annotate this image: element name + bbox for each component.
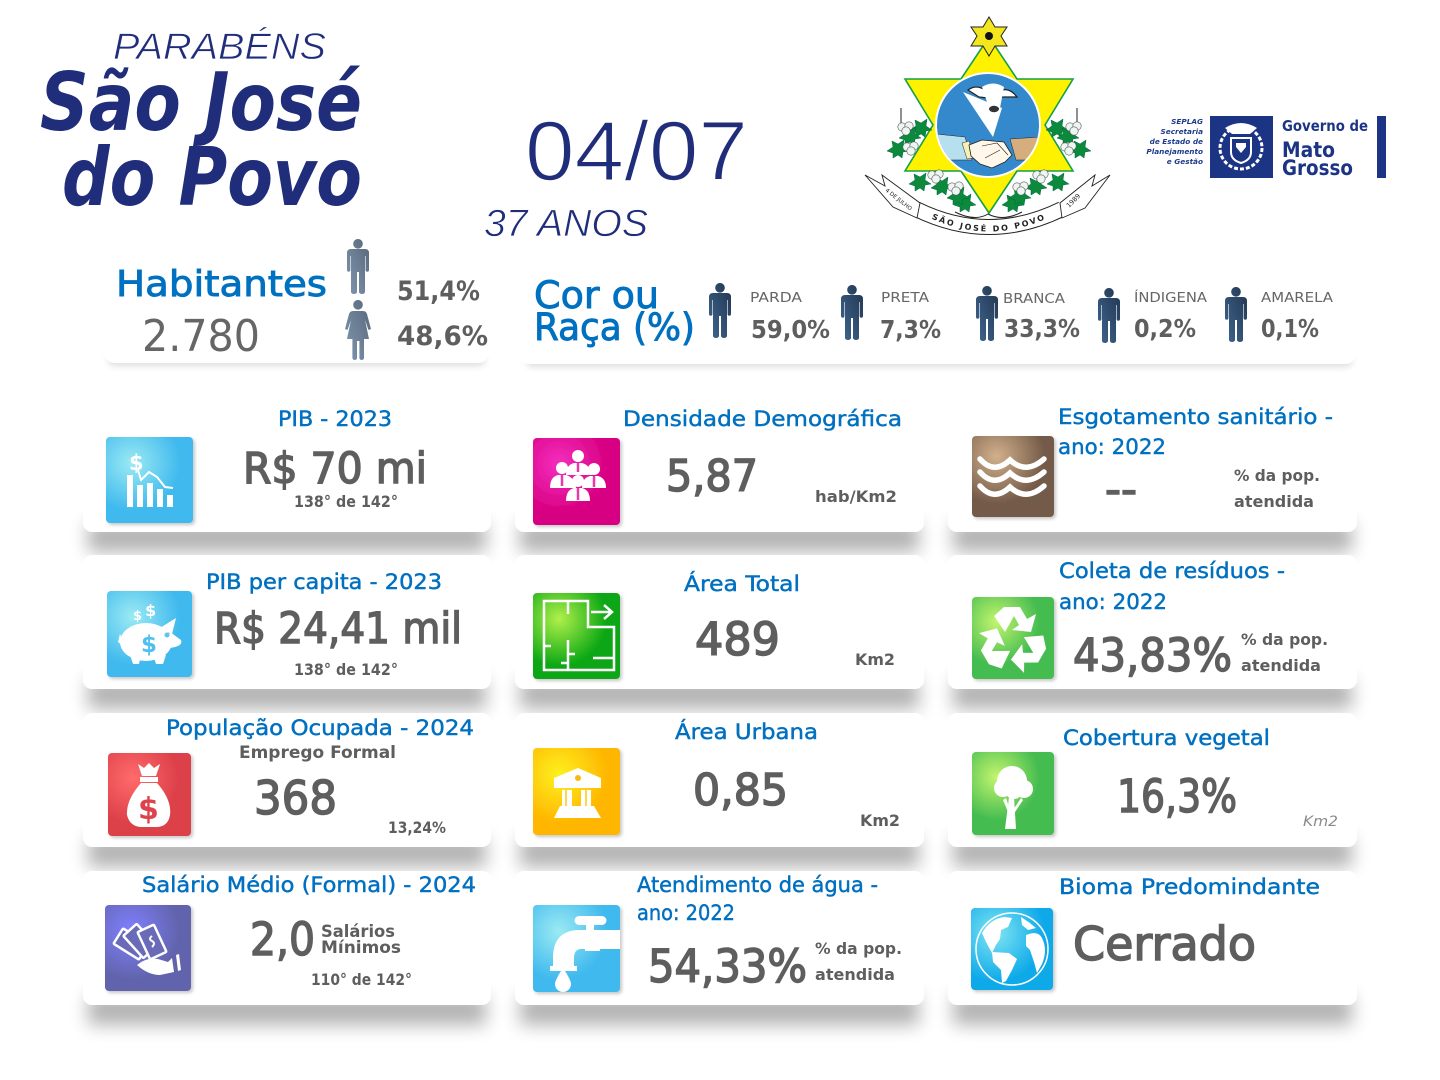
panel: densidade demográfica bbox=[515, 398, 924, 552]
icon: woman bbox=[345, 300, 371, 360]
branca: 33,3% bbox=[1004, 314, 1080, 343]
panel: PIB per capita bbox=[83, 555, 491, 709]
logo wordmark: Governo de bbox=[1282, 117, 1368, 135]
value: 0,85 bbox=[693, 765, 788, 816]
indígena: ÍNDIGENA bbox=[1134, 289, 1208, 306]
heading: PIB - 2023 bbox=[278, 407, 392, 431]
heading bbox=[637, 873, 878, 925]
value: 368 bbox=[254, 771, 337, 825]
cotton branches bbox=[887, 119, 1091, 212]
date: 04/07 bbox=[525, 104, 748, 198]
indígena: 0,2% bbox=[1134, 314, 1196, 343]
value: R$ 70 mi bbox=[243, 444, 427, 494]
icon: recycle bbox=[972, 597, 1054, 679]
preta: 7,3% bbox=[880, 315, 941, 344]
anniversary age: 37 ANOS bbox=[484, 203, 648, 245]
ribbon date: 4 DE JULHO bbox=[884, 188, 913, 213]
title: parabéns: PARABÉNS bbox=[113, 26, 326, 67]
unit: hab/Km2 bbox=[815, 487, 897, 506]
title: São José do Povo: São José bbox=[40, 56, 362, 149]
panel: bioma bbox=[948, 871, 1357, 1025]
SEPLAG text: Planejamento bbox=[1146, 147, 1203, 156]
unit: atendida bbox=[1241, 656, 1321, 675]
value: 43,83% bbox=[1073, 629, 1232, 682]
heading: Cor ou bbox=[534, 274, 659, 317]
panel: área total bbox=[515, 555, 924, 709]
unit bbox=[815, 939, 902, 984]
heading: Área Urbana bbox=[675, 719, 818, 744]
SEPLAG text bbox=[1146, 117, 1203, 166]
heading: Habitantes bbox=[116, 264, 327, 305]
heading: Atendimento de água - bbox=[637, 873, 878, 897]
rank: 138° de 142° bbox=[294, 660, 398, 679]
small top star bbox=[971, 17, 1007, 56]
title: São José do Povo: do Povo bbox=[62, 131, 362, 224]
population number: 2.780 bbox=[142, 311, 260, 362]
unit: atendida bbox=[815, 965, 895, 984]
icon: piggy bank: $ bbox=[145, 601, 156, 620]
unit: Mínimos bbox=[321, 938, 401, 958]
share: 13,24% bbox=[388, 818, 446, 837]
icon: falling chart: $ bbox=[129, 451, 144, 475]
icon: bank building bbox=[533, 748, 620, 835]
unit: Km2 bbox=[1303, 814, 1338, 830]
logo wordmark: Mato bbox=[1282, 138, 1335, 162]
heading: Coleta de resíduos - bbox=[1059, 559, 1285, 583]
rank: 138° de 142° bbox=[294, 492, 398, 511]
value: 16,3% bbox=[1117, 770, 1237, 823]
unit: Salários bbox=[321, 922, 395, 942]
amarela bbox=[1225, 287, 1334, 343]
icon: people bbox=[533, 438, 620, 525]
icon: floor plan bbox=[533, 593, 620, 679]
rank: 110° de 142° bbox=[311, 970, 412, 989]
value: 489 bbox=[695, 613, 780, 666]
unit: atendida bbox=[1234, 492, 1314, 511]
heading: PIB per capita - 2023 bbox=[206, 570, 442, 594]
ribbon year: 1989 bbox=[1065, 192, 1082, 209]
value: -- bbox=[1105, 465, 1137, 515]
value: R$ 24,41 mil bbox=[214, 604, 462, 654]
heading: Salário Médio (Formal) - 2024 bbox=[142, 873, 476, 897]
icon: waves bbox=[972, 436, 1054, 517]
logo wordmark: Grosso bbox=[1282, 156, 1353, 180]
panel: atendimento de água bbox=[515, 871, 924, 1025]
amarela: AMARELA bbox=[1261, 290, 1334, 306]
heading: ano: 2022 bbox=[1058, 435, 1166, 459]
unit bbox=[321, 922, 401, 958]
panel: esgotamento sanitário bbox=[948, 398, 1357, 552]
heading: Densidade Demográfica bbox=[623, 407, 902, 431]
heading bbox=[534, 274, 695, 349]
panel: cor ou raça bbox=[516, 262, 1357, 367]
SEPLAG text: e Gestão bbox=[1167, 157, 1203, 166]
unit bbox=[1234, 466, 1320, 511]
star of David bbox=[905, 37, 1073, 213]
unit: % da pop. bbox=[815, 939, 902, 958]
icon: tree bbox=[972, 752, 1054, 835]
parda: PARDA bbox=[750, 290, 803, 306]
heading: ano: 2022 bbox=[1059, 590, 1167, 614]
heading: Esgotamento sanitário - bbox=[1058, 405, 1333, 429]
unit: Km2 bbox=[855, 650, 895, 669]
parda bbox=[709, 283, 830, 344]
heading: Área Total bbox=[684, 571, 800, 596]
title: São José do Povo bbox=[40, 56, 362, 224]
icon: cash in hand bbox=[105, 905, 191, 991]
unit bbox=[1241, 630, 1328, 675]
panel: área urbana bbox=[515, 713, 924, 867]
SEPLAG text: de Estado de bbox=[1150, 137, 1203, 146]
heading: Cobertura vegetal bbox=[1063, 726, 1270, 750]
logo crest bbox=[1210, 116, 1273, 178]
panel: PIB 2023 bbox=[83, 398, 491, 552]
ribbon text: SÃO JOSÉ DO POVO bbox=[932, 214, 1044, 232]
heading: População Ocupada - 2024 bbox=[166, 716, 474, 740]
Governo de Mato Grosso logo bbox=[1210, 116, 1386, 180]
heading: Raça (%) bbox=[534, 306, 695, 349]
icon: money bag: $ bbox=[138, 792, 159, 827]
branca: BRANCA bbox=[1003, 291, 1066, 307]
icon: money bag bbox=[108, 753, 191, 836]
panel: população ocupada bbox=[83, 713, 491, 867]
value: 54,33% bbox=[648, 940, 807, 993]
men share: 51,4% bbox=[397, 276, 480, 307]
parda: 59,0% bbox=[751, 315, 830, 344]
women share: 48,6% bbox=[397, 321, 488, 352]
heading: ano: 2022 bbox=[637, 901, 735, 925]
heading bbox=[1058, 405, 1333, 459]
icon: tap bbox=[533, 905, 620, 992]
heading: Bioma Predomindante bbox=[1059, 875, 1320, 899]
unit: % da pop. bbox=[1234, 466, 1320, 485]
value: Cerrado bbox=[1073, 917, 1256, 971]
amarela: 0,1% bbox=[1261, 314, 1319, 343]
indígena bbox=[1098, 288, 1208, 343]
panel: coleta de resíduos bbox=[948, 555, 1357, 709]
value: 5,87 bbox=[666, 451, 758, 502]
preta: PRETA bbox=[881, 290, 930, 306]
SEPLAG text: Secretaria bbox=[1160, 127, 1203, 136]
heading bbox=[1059, 559, 1285, 614]
panel: salário médio bbox=[83, 871, 491, 1025]
icon: globe bbox=[971, 908, 1053, 990]
blue medallion with cow and handshake bbox=[936, 73, 1040, 177]
icon: man bbox=[347, 239, 369, 294]
municipal coat of arms bbox=[864, 16, 1110, 235]
panel: habitantes bbox=[103, 239, 490, 366]
preta bbox=[841, 285, 941, 344]
panel: cobertura vegetal bbox=[948, 713, 1357, 867]
unit: % da pop. bbox=[1241, 630, 1328, 649]
icon: falling chart bbox=[106, 437, 193, 523]
branca bbox=[976, 286, 1080, 343]
unit: Km2 bbox=[860, 811, 900, 830]
logo wordmark bbox=[1282, 117, 1368, 180]
ribbon bbox=[865, 175, 1110, 232]
SEPLAG text: SEPLAG bbox=[1171, 117, 1203, 126]
cotton stems bbox=[901, 108, 1077, 218]
icon: piggy bank bbox=[107, 591, 192, 677]
icon: piggy bank: $ bbox=[133, 609, 142, 624]
value: 2,0 bbox=[250, 913, 315, 966]
icon: piggy bank: $ bbox=[141, 632, 157, 658]
subheading: Emprego Formal bbox=[239, 743, 396, 763]
